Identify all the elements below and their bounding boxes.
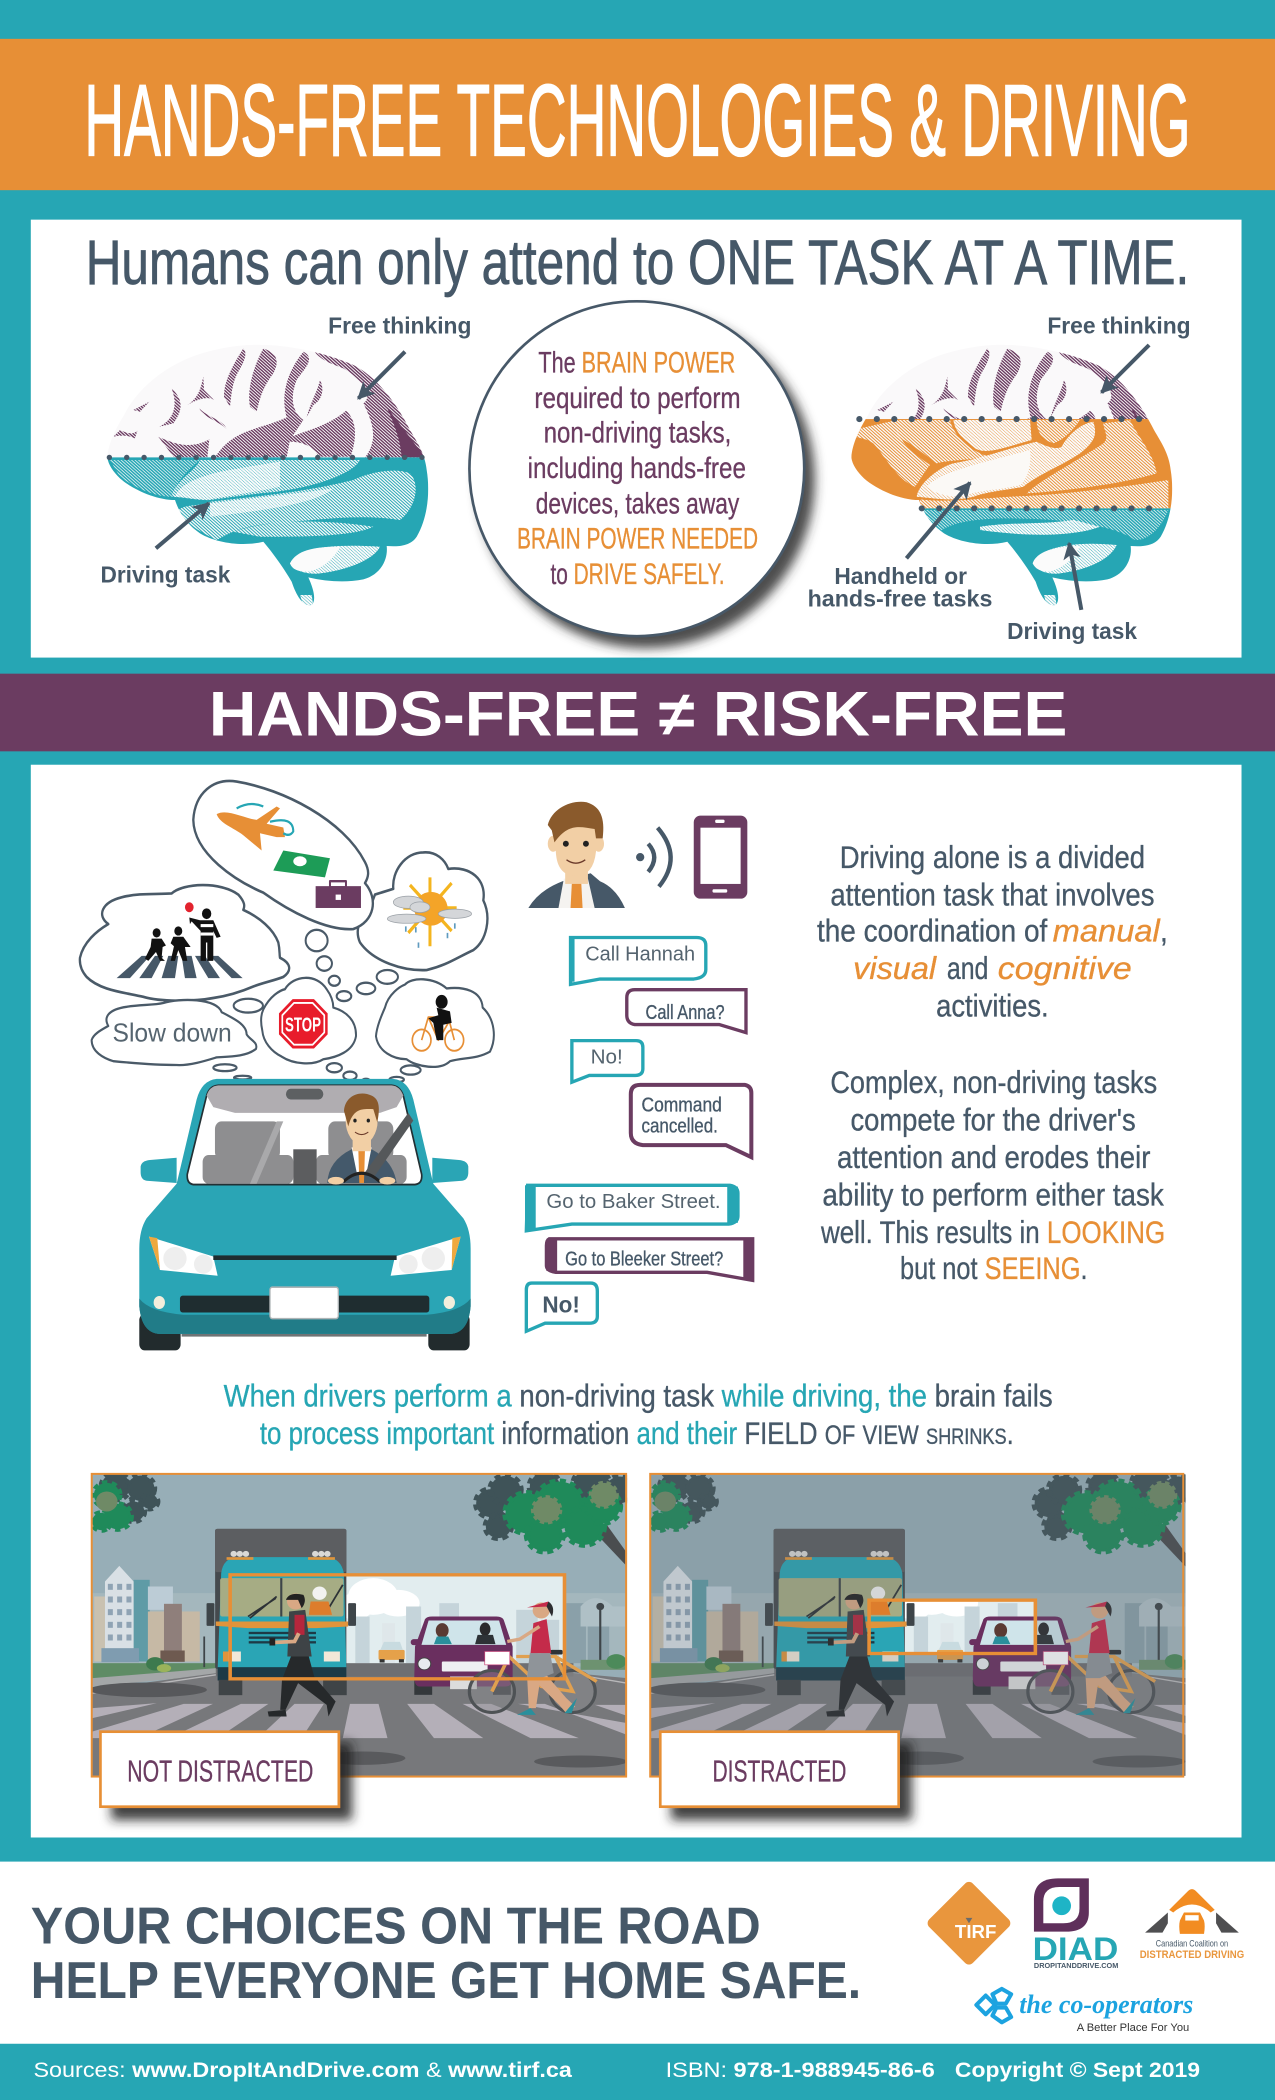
bottom bar: sources: Copyright © Sept 2019 (955, 2058, 1200, 2082)
icon: stop sign: STOP (285, 1013, 321, 1036)
callout: brain power circle: to DRIVE SAFELY. (550, 558, 725, 591)
logo: Canadian Coalition on Distracted Driving (1140, 1889, 1244, 1961)
bubble: call hannah: Call Hannah (585, 942, 695, 965)
fog lights (154, 1296, 455, 1309)
bubble: go to baker street: Go to Baker Street. (546, 1190, 721, 1213)
arrow: driving task right (1069, 543, 1081, 610)
windshield (187, 1085, 422, 1185)
label: not distracted: NOT DISTRACTED (127, 1753, 313, 1788)
logo: DIAD (1033, 1878, 1118, 1970)
icon: money (273, 851, 330, 877)
callout: brain power circle: non-driving tasks, (544, 417, 731, 450)
label: driving task right: Driving task (1007, 618, 1137, 644)
slogan (31, 1897, 861, 2010)
text: slow down: Slow down (112, 1019, 232, 1047)
logo: DIAD: DROPITANDDRIVE.COM (1034, 1961, 1118, 1970)
callout: brain power circle: including hands-free (528, 452, 746, 485)
arrow: handheld tasks (906, 483, 970, 558)
body (139, 1079, 471, 1334)
seats (203, 1121, 407, 1184)
text block: divided attention: Complex, non-driving tasks (830, 1065, 1157, 1100)
bubble: call anna (627, 990, 746, 1033)
banner: hands-free is not risk-free (0, 674, 1275, 751)
label: driving task left: Driving task (100, 562, 231, 588)
driver (327, 1093, 413, 1185)
text block: divided attention: , (1160, 914, 1168, 949)
thought cloud: crossing (80, 885, 289, 1001)
icon: man (528, 802, 625, 908)
bubble: call hannah (569, 938, 706, 984)
logo: the co-operators (976, 1989, 1193, 2034)
thought cloud: stop (261, 978, 356, 1063)
grille (180, 1296, 429, 1312)
text block: divided attention (817, 840, 1168, 1286)
bubble: go to bleeker street: Go to Bleeker Street? (565, 1249, 723, 1271)
headlights (149, 1237, 461, 1276)
car (139, 1079, 471, 1350)
label: not distracted (100, 1732, 339, 1807)
wheels (139, 1314, 470, 1350)
licence plate (270, 1287, 338, 1319)
logo: TIRF: TIRF (955, 1921, 996, 1942)
bubble: command cancelled (631, 1085, 751, 1157)
logo: the co-operators: A Better Place For You (1077, 2022, 1189, 2034)
label: distracted: DISTRACTED (712, 1753, 846, 1788)
text block: divided attention: compete for the driver's (850, 1102, 1136, 1137)
label: free thinking left: Free thinking (328, 312, 471, 338)
icon: phone (694, 816, 747, 899)
bumper (139, 1299, 471, 1334)
icon: cyclist (412, 995, 464, 1051)
bubble: no bold: No! (542, 1292, 580, 1318)
logo: the co-operators: the co-operators (1019, 1989, 1193, 2019)
icon: man with headset-free phone (528, 802, 747, 908)
logo: TIRF (925, 1880, 1013, 1967)
divider dots: right brain (859, 419, 1165, 508)
label: handheld or hands-free tasks: hands-free tasks (808, 586, 992, 612)
field of view box (869, 1600, 1035, 1653)
text block: divided attention: attention and erodes their (837, 1140, 1150, 1175)
arrow: free thinking left (358, 352, 405, 398)
icon: plane (217, 806, 285, 851)
callout: brain power circle: required to perform (534, 382, 741, 415)
callout: brain power circle: devices, takes away (536, 488, 739, 521)
text block: field of view: to process important information and their FIELD OF VIEW SHRINKS. (260, 1416, 1014, 1451)
text block: field of view (224, 1378, 1053, 1451)
slogan: YOUR CHOICES ON THE ROAD (31, 1897, 761, 1955)
callout: brain power circle: The BRAIN POWER (538, 346, 735, 379)
mirrors (141, 1158, 468, 1183)
panel: divided attention (31, 765, 1242, 1837)
brain: left (100, 340, 440, 611)
logo: DIAD: DIAD (1033, 1931, 1118, 1967)
thought cloud: slow down (92, 1000, 256, 1065)
text block: divided attention: and (947, 951, 988, 986)
bubble: no: No! (591, 1045, 623, 1068)
bubble: command cancelled: cancelled. (642, 1115, 718, 1137)
callout: brain power circle: BRAIN POWER NEEDED (517, 522, 758, 555)
logo: Canadian Coalition on Distracted Driving: Canadian Coalition on (1156, 1939, 1228, 1949)
text block: divided attention: cognitive (998, 951, 1132, 986)
thought cloud: plane, money, briefcase (193, 781, 373, 929)
thought bubbles (213, 930, 421, 1091)
banner: hands-free is not risk-free: HANDS-FREE ≠ RISK-FREE (209, 679, 1067, 749)
text block: divided attention: well. This results in LOOKING (820, 1215, 1165, 1250)
callout: brain power circle (469, 301, 804, 636)
bottom bar: sources (33, 2058, 1200, 2082)
icon: school crossing (117, 902, 243, 978)
footer panel (0, 1862, 1275, 2044)
icon: signal waves (638, 828, 671, 887)
icon: clouds (237, 804, 293, 835)
logo: Canadian Coalition on Distracted Driving: DISTRACTED DRIVING (1140, 1949, 1244, 1961)
photo: not distracted (89, 1468, 634, 1807)
thought cloud: cyclist (376, 979, 494, 1067)
text block: divided attention: the coordination of (817, 914, 1048, 949)
bubble: no (572, 1041, 643, 1082)
panel: one task at a time (31, 220, 1242, 658)
brain: right (851, 348, 1172, 606)
text block: divided attention: activities. (936, 989, 1049, 1024)
icon: briefcase (316, 881, 361, 908)
label: distracted (660, 1732, 899, 1807)
text block: divided attention: attention task that involves (830, 877, 1154, 912)
arrow: free thinking right (1102, 345, 1149, 392)
field of view box (230, 1575, 564, 1679)
arrow: driving task left (156, 503, 209, 548)
bubble: command cancelled: Command (642, 1095, 722, 1117)
photo: distracted (647, 1468, 1193, 1807)
label: handheld or hands-free tasks (808, 563, 992, 612)
label: handheld or hands-free tasks: Handheld or (834, 563, 967, 589)
thought cloud: weather (358, 852, 487, 970)
text block: divided attention: ability to perform either task (822, 1177, 1164, 1212)
bubble: go to baker street (525, 1185, 738, 1231)
text block: divided attention: manual (1053, 914, 1161, 949)
speech bubbles: voice commands (525, 938, 754, 1331)
bottom bar: sources: Sources: www.DropItAndDrive.com & www.tirf.ca (33, 2058, 573, 2082)
bubble: go to bleeker street (546, 1239, 754, 1280)
text block: divided attention: but not SEEING. (900, 1251, 1088, 1286)
icon: sun and rain (387, 877, 472, 948)
text block: field of view: When drivers perform a non-driving task while driving, the brain fails (224, 1378, 1053, 1413)
bottom bar: sources: ISBN: 978-1-988945-86-6 (666, 2058, 935, 2082)
text block: divided attention: Driving alone is a divided (840, 840, 1145, 875)
bubble: call anna: Call Anna? (646, 1002, 725, 1024)
illustration: driver with thought clouds (80, 781, 494, 1350)
text block: divided attention: visual (853, 951, 937, 986)
slogan: HELP EVERYONE GET HOME SAFE. (31, 1952, 861, 2010)
label: free thinking right: Free thinking (1047, 312, 1191, 338)
bubble: no bold (526, 1283, 597, 1331)
